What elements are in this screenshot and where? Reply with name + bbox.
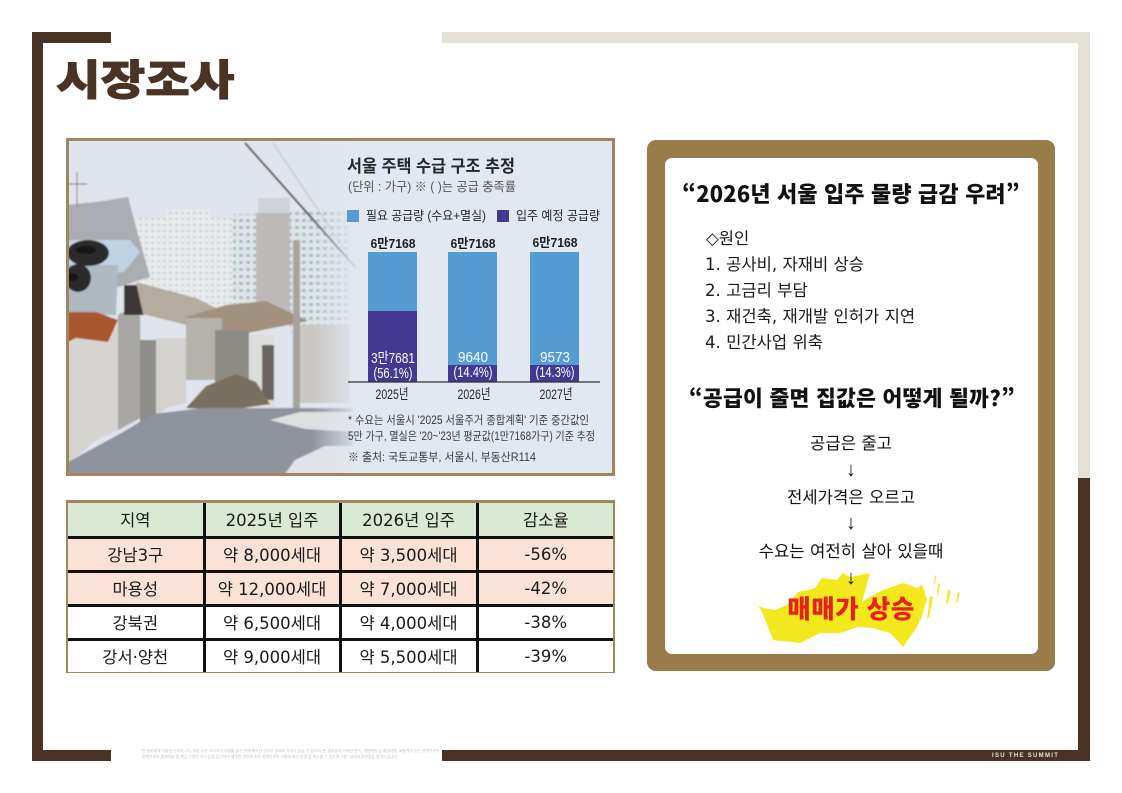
chart legend: 입주 예정 공급량	[516, 209, 600, 223]
bar chart: 6만7168	[532, 235, 578, 250]
bar chart: 6만7168	[450, 236, 496, 251]
row: 강서·양천: 강서·양천	[102, 648, 168, 667]
row: 강남3구: 약 8,000세대	[223, 546, 321, 565]
table header: 2025년 입주	[226, 511, 318, 530]
row: 강북권: -38%	[524, 612, 567, 632]
text block: causes: 3. 재건축, 재개발 인허가 지연	[705, 307, 915, 326]
row: 마용성: 마용성	[112, 580, 158, 599]
disclaimer: 관계기관의 결재여부 및 해당 기관의 고시 등을 참고하여 제작된 것으로 추후 관계기관의 사정에 따라 변경 및 취소될 수 있으며, 이는 당사와 무관함을 알려드립니다.	[142, 754, 398, 760]
text block: causes: 2. 고금리 부담	[705, 281, 808, 300]
row: 마용성: -42%	[524, 578, 567, 598]
step: supply falls: 공급은 줄고	[810, 433, 892, 453]
bar chart: 2027년	[540, 386, 572, 402]
bar chart: (14.3%)	[536, 365, 574, 381]
step: rents rise: 전세가격은 오르고	[787, 487, 915, 507]
row: 강서·양천: 약 9,000세대	[223, 648, 321, 667]
text block: causes: 1. 공사비, 자재비 상승	[705, 255, 864, 274]
chart legend: 필요 공급량 (수요+멸실)	[366, 209, 486, 223]
arrow: ↓	[846, 512, 856, 534]
photo: hillside village	[65, 141, 358, 474]
chart title: 서울 주택 수급 구조 추정	[347, 157, 515, 176]
highlight: yellow brush	[758, 573, 960, 647]
row: 강남3구: -56%	[524, 544, 567, 564]
chart footnote: * 수요는 서울시 '2025 서울주거 종합계획' 기준 중간값인	[348, 414, 589, 427]
row: 강남3구	[68, 537, 613, 571]
panel: photo and supply chart	[66, 138, 615, 476]
row: 강북권: 약 4,000세대	[359, 614, 458, 633]
bar chart: (14.4%)	[454, 365, 492, 381]
title: 시장조사	[56, 47, 235, 108]
chart footnote: ※ 출처: 국토교통부, 서울시, 부동산R114	[348, 451, 537, 464]
row: 강북권: 강북권	[112, 614, 158, 633]
bar chart: 2025년	[376, 386, 408, 402]
row: 강서·양천: -39%	[524, 647, 567, 666]
result: price rise: 매매가 상승	[787, 589, 915, 626]
row: 강북권	[68, 605, 613, 639]
chart legend	[347, 209, 600, 223]
bar chart: 6만7168	[370, 236, 416, 251]
row: 강남3구: 강남3구	[107, 546, 163, 565]
table header: 감소율	[523, 511, 569, 530]
bar chart: 3만7681	[371, 350, 415, 367]
arrow: ↓	[846, 459, 856, 481]
brand mark: ISU THE SUMMIT	[992, 752, 1059, 758]
bar chart	[348, 235, 600, 402]
chart footnote	[348, 414, 595, 464]
bar chart: 9640	[458, 350, 488, 366]
row: 강서·양천	[68, 639, 613, 672]
table header: 지역	[120, 511, 150, 530]
disclaimer	[142, 749, 440, 760]
heading: price question: “공급이 줄면 집값은 어떻게 될까?”	[689, 382, 1015, 413]
row: 마용성: 약 12,000세대	[218, 580, 326, 599]
row: 강북권: 약 6,500세대	[223, 614, 321, 633]
row: 마용성	[68, 571, 613, 605]
arrow: ↓	[846, 567, 856, 589]
bar chart: 2026년	[458, 386, 490, 402]
row: 마용성: 약 7,000세대	[359, 580, 458, 599]
inner white card	[665, 158, 1038, 654]
table: regional move-in volume	[66, 500, 615, 673]
text block: causes	[705, 229, 915, 352]
row: 강남3구: 약 3,500세대	[359, 546, 458, 565]
text block: causes: 4. 민간사업 위축	[705, 333, 823, 352]
step: demand alive: 수요는 여전히 살아 있을때	[759, 541, 943, 561]
text block: causes: ◇원인	[706, 229, 749, 248]
flow: supply to price	[758, 433, 960, 647]
bar chart: (56.1%)	[374, 366, 412, 382]
table header: 2026년 입주	[362, 511, 455, 530]
panel: supply outlook	[647, 140, 1055, 671]
bar chart: 9573	[540, 350, 570, 366]
table header	[68, 503, 613, 672]
chart unit note: (단위 : 가구) ※ ( )는 공급 충족률	[348, 180, 516, 194]
heading: 2026 supply warning: “2026년 서울 입주 물량 급감 우려”	[682, 178, 1020, 209]
row: 강서·양천: 약 5,500세대	[359, 648, 458, 667]
